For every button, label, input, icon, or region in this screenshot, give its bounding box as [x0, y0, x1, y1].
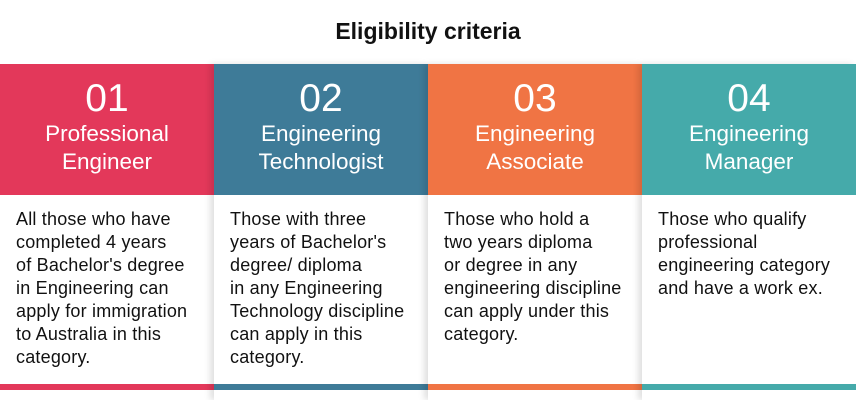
text 01: completed 4 years — [16, 232, 166, 252]
panel: engineering manager — [642, 64, 856, 400]
header 03 — [428, 64, 642, 195]
bar 02 — [214, 384, 428, 390]
text 02: category. — [230, 347, 305, 367]
text 03: or degree in any — [444, 255, 577, 275]
text 01: All those who have — [16, 209, 171, 229]
text 02: degree/ diploma — [230, 255, 362, 275]
text 02: Technology discipline — [230, 301, 404, 321]
text 01: in Engineering can — [16, 278, 169, 298]
header 04: Manager — [705, 149, 793, 174]
header 04 — [642, 64, 856, 195]
text 01: category. — [16, 347, 91, 367]
panel: engineering associate — [428, 64, 642, 400]
text 02: in any Engineering — [230, 278, 383, 298]
header 04: 04 — [727, 77, 771, 120]
text 01: apply for immigration — [16, 301, 187, 321]
bar 01 — [0, 384, 214, 390]
text 01: to Australia in this — [16, 324, 161, 344]
bar 04 — [642, 384, 856, 390]
text 03: engineering discipline — [444, 278, 622, 298]
header 02 — [214, 64, 428, 195]
header 03: Associate — [486, 149, 584, 174]
header 01: Professional — [45, 121, 169, 146]
text 03: can apply under this — [444, 301, 609, 321]
text 04: professional — [658, 232, 757, 252]
text 01: of Bachelor's degree — [16, 255, 185, 275]
text 03: two years diploma — [444, 232, 592, 252]
text 04: and have a work ex. — [658, 278, 823, 298]
header 03: Engineering — [475, 121, 595, 146]
title: Eligibility criteria — [335, 18, 521, 44]
header 01 — [0, 64, 214, 195]
panel: engineering technologist — [214, 64, 428, 400]
bar 03 — [428, 384, 642, 390]
text 04 — [658, 209, 830, 298]
text 03: category. — [444, 324, 519, 344]
header 02: Engineering — [261, 121, 381, 146]
text 01 — [16, 209, 187, 367]
header 04: Engineering — [689, 121, 809, 146]
panel: professional engineer — [0, 64, 214, 400]
text 02: can apply in this — [230, 324, 362, 344]
text 02: years of Bachelor's — [230, 232, 386, 252]
header 03: 03 — [513, 77, 557, 120]
text 04: Those who qualify — [658, 209, 806, 229]
header 01: Engineer — [62, 149, 152, 174]
text 04: engineering category — [658, 255, 830, 275]
header 02: Technologist — [258, 149, 384, 174]
text 03: Those who hold a — [444, 209, 589, 229]
header 02: 02 — [299, 77, 343, 120]
text 02: Those with three — [230, 209, 366, 229]
text 02 — [230, 209, 404, 367]
header 01: 01 — [85, 77, 129, 120]
text 03 — [444, 209, 622, 344]
